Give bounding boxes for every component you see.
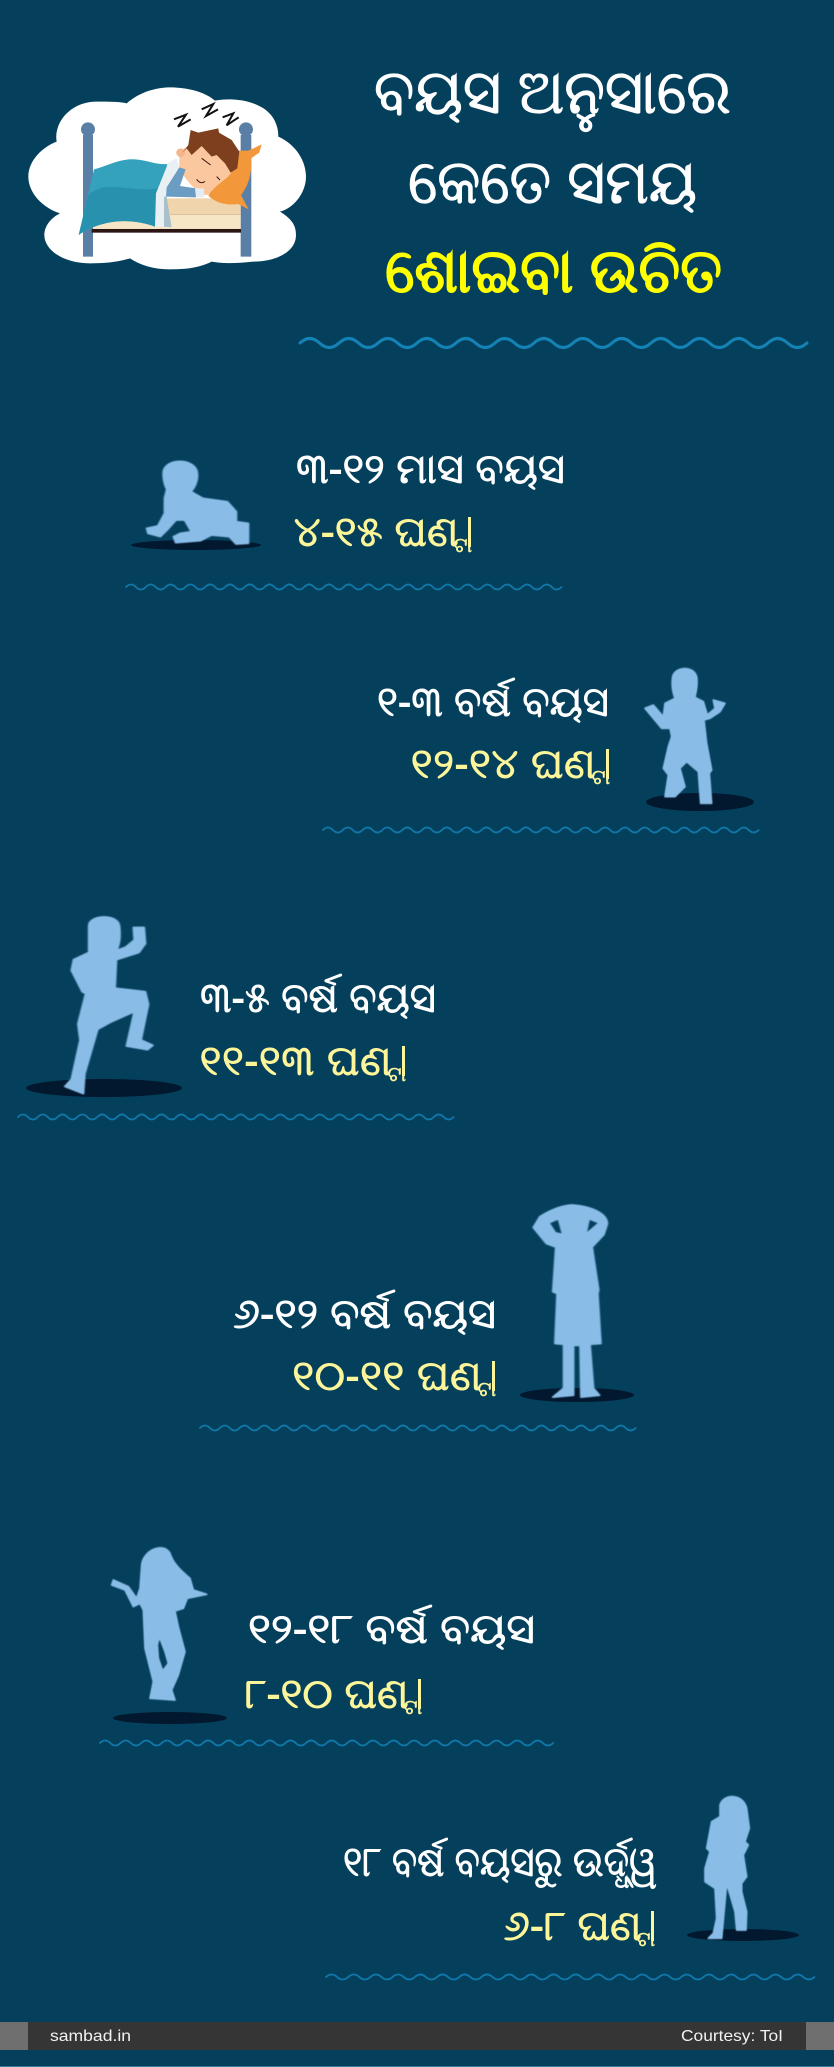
hours label: ଟା: [454, 535, 472, 557]
row: 6-12 years: [200, 1205, 636, 1430]
icon: toddler silhouette: [645, 669, 725, 803]
row: 3-5 years: [18, 917, 454, 1120]
wave: [200, 1426, 636, 1430]
wave: [323, 828, 759, 832]
age label: ୧୨-୧୮ ବର୍ଷ ବୟସ: [248, 1605, 535, 1652]
hours label: ୧୧-୧୩ ଘଣ୍: [200, 1037, 394, 1084]
boy: [166, 143, 234, 197]
icon: crawling baby silhouette: [147, 461, 248, 544]
hours label: ଟା: [388, 1064, 406, 1086]
shadow: [646, 793, 754, 811]
footer courtesy: Courtesy: ToI: [681, 2028, 783, 2045]
row: 12-18 years: [100, 1548, 553, 1746]
title: [374, 58, 731, 306]
row: 1-3 years: [323, 669, 759, 832]
illustration: sleeping boy in bed on a white cloud: [28, 87, 306, 269]
shadow: [520, 1388, 634, 1402]
hours label: ୪-୧୫ ଘଣ୍: [294, 508, 460, 555]
wave: [326, 1974, 814, 1980]
icon: teen girl silhouette: [112, 1548, 207, 1700]
footer source: sambad.in: [50, 2028, 131, 2045]
age label: ୩-୫ ବର୍ଷ ବୟସ: [200, 974, 436, 1021]
hair: [182, 128, 239, 173]
row: 3-12 months: [126, 445, 565, 590]
shadow: [26, 1079, 182, 1097]
row: above 18 years: [326, 1797, 814, 1980]
shadow: [113, 1712, 227, 1724]
icon: child with hands on head silhouette: [533, 1205, 607, 1397]
bed posts: [81, 122, 253, 257]
pillow: [208, 144, 262, 209]
hours label: ୬-୮ ଘଣ୍: [504, 1902, 643, 1949]
age label: ୬-୧୨ ବର୍ଷ ବୟସ: [233, 1290, 496, 1337]
hours label: ଟା: [478, 1379, 496, 1401]
mattress: [92, 198, 241, 233]
age label: ୧-୩ ବର୍ଷ ବୟସ: [377, 678, 609, 725]
snore marks: [174, 104, 239, 127]
cloud: [28, 87, 306, 269]
shadow: [687, 1929, 799, 1941]
shadow: [131, 540, 261, 550]
title line 2: କେତେ ସମୟ: [408, 148, 697, 217]
title wave divider: [300, 338, 807, 348]
wave: [18, 1114, 454, 1120]
age label: ୩-୧୨ ମାସ ବୟସ: [296, 445, 565, 492]
hours label: ଟା: [592, 767, 610, 789]
hours label: ୧୨-୧୪ ଘଣ୍: [411, 740, 598, 787]
title line 3: ଶୋଇବା ଉଚିତ: [385, 237, 722, 306]
footer bar: [0, 2022, 834, 2050]
hours label: ୮-୧୦ ଘଣ୍: [245, 1670, 410, 1717]
wave: [126, 584, 562, 590]
wave: [100, 1740, 553, 1746]
icon: woman silhouette: [705, 1797, 749, 1938]
hours label: ୧୦-୧୧ ଘଣ୍: [292, 1352, 484, 1399]
icon: child stepping silhouette: [65, 917, 153, 1094]
age label: ୧୮ ବର୍ଷ ବୟସରୁ ଉର୍ଦ୍ଧ୍ୱ: [343, 1838, 657, 1889]
hours label: ଟା: [637, 1929, 655, 1951]
title line 1: ବୟସ ଅନୁସାରେ: [374, 58, 731, 132]
hours label: ଟା: [404, 1697, 422, 1719]
blanket: [79, 158, 179, 235]
